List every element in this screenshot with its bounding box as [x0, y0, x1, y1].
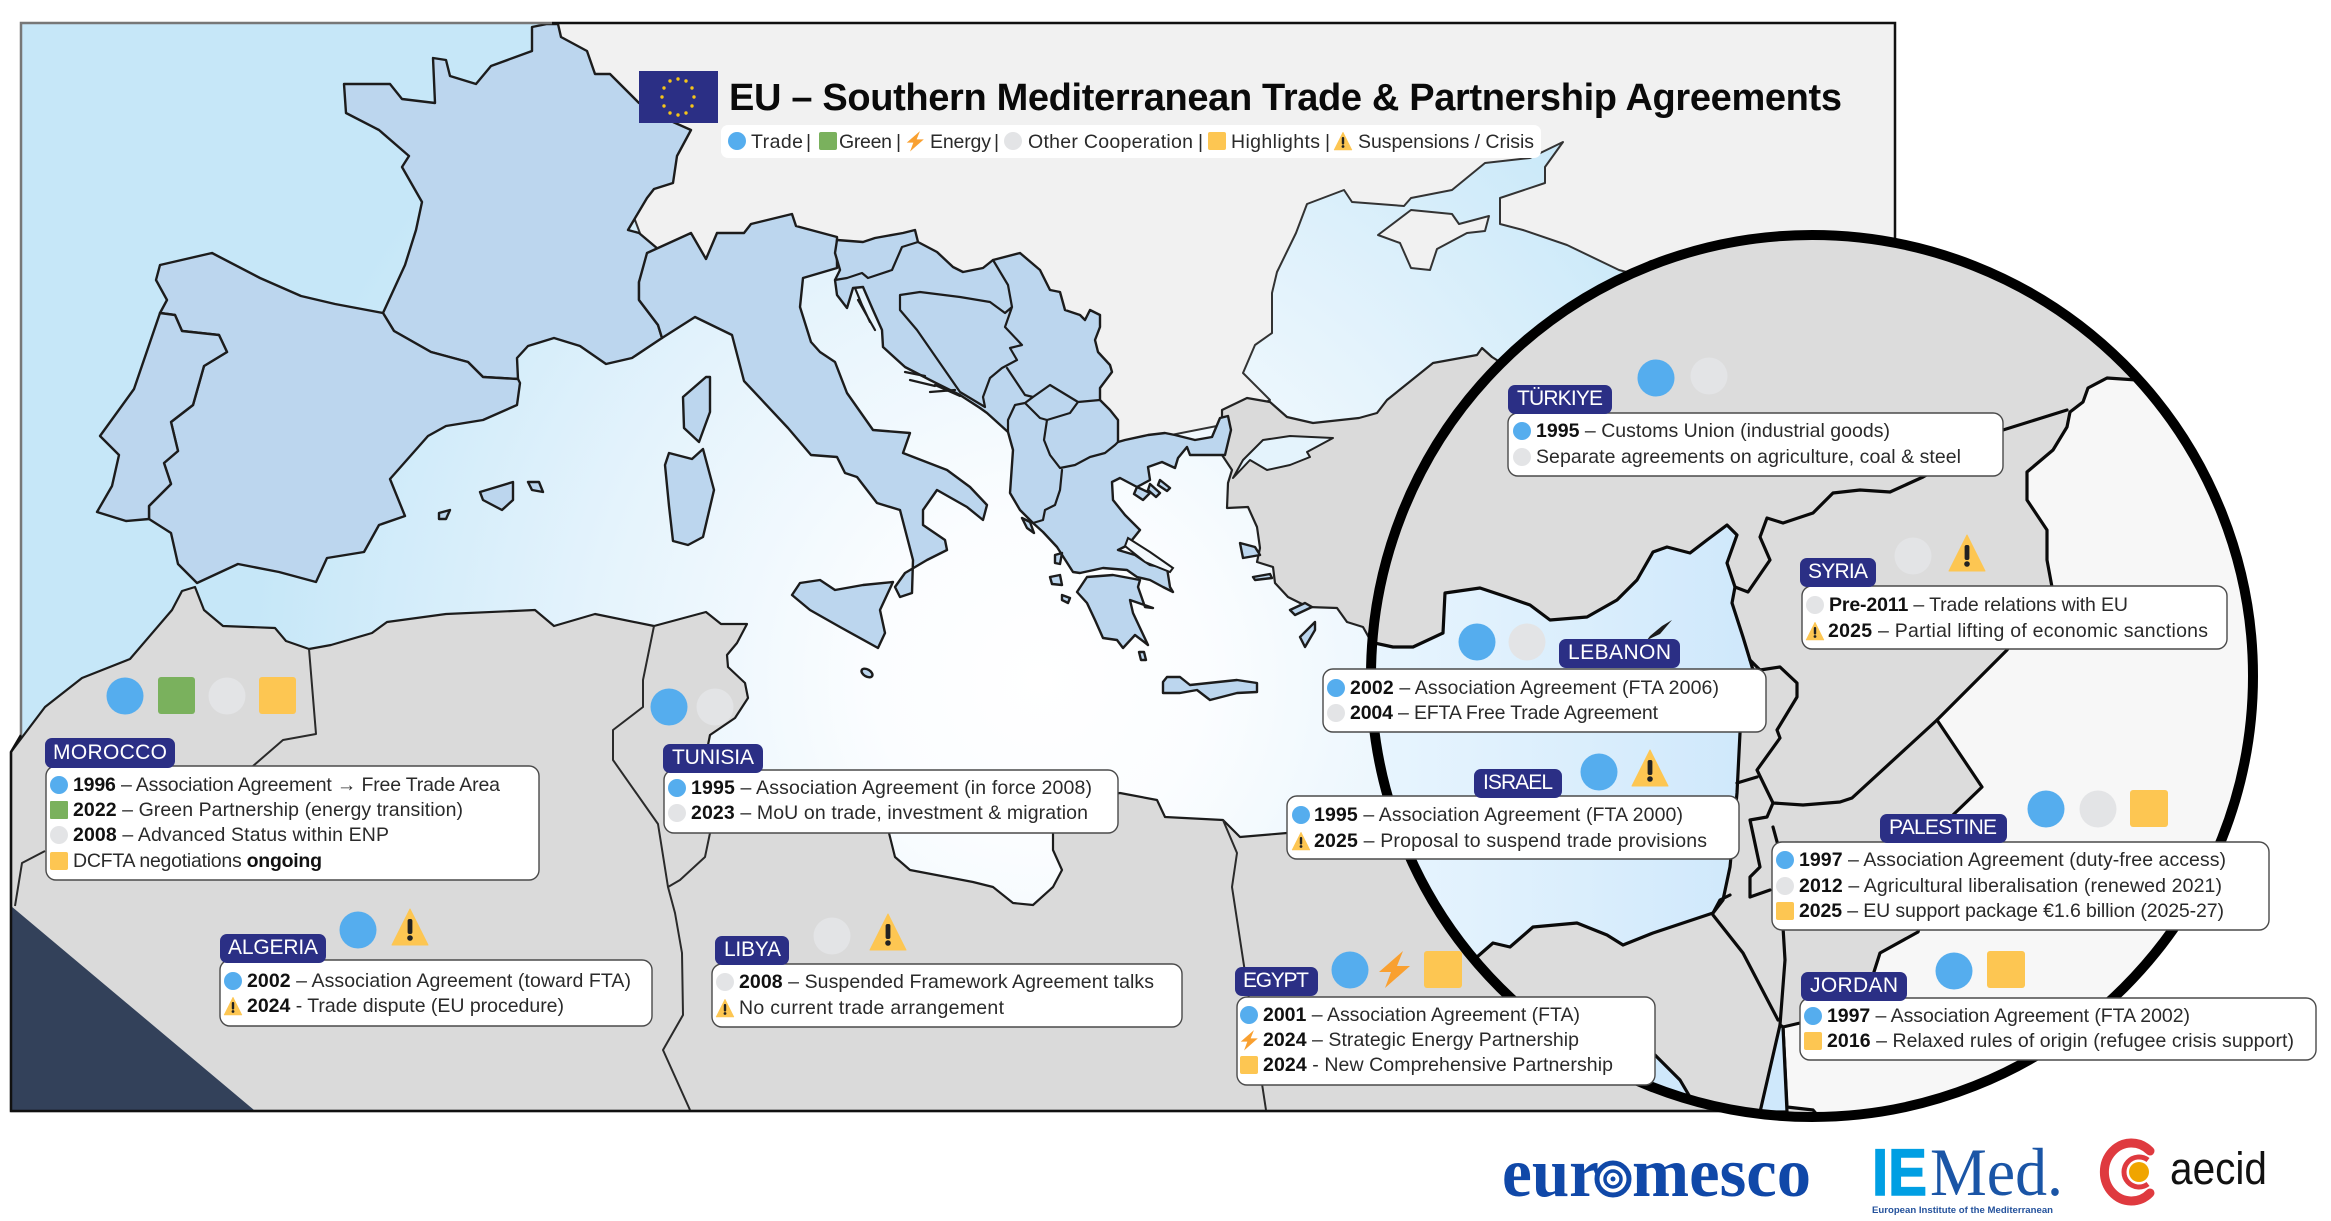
- panel: Egypt: 2001 – Association Agreement (FTA): [1263, 1004, 1580, 1026]
- EU countries: [97, 24, 1315, 700]
- panel: Jordan: [1800, 951, 2316, 1060]
- legend: Suspensions / Crisis: [1358, 131, 1534, 153]
- panel: Palestine: [1772, 790, 2269, 930]
- legend: [721, 125, 1541, 158]
- Crimea: [1378, 210, 1489, 270]
- legend: Energy: [930, 131, 991, 153]
- panel: Jordan: JORDAN: [1810, 974, 1898, 997]
- panel: Egypt: 2024 - New Comprehensive Partnership: [1263, 1054, 1613, 1076]
- North Africa borders: [15, 626, 1266, 1110]
- legend: |: [1325, 131, 1330, 153]
- panel: Morocco: 2022 – Green Partnership (energy transition): [73, 799, 463, 821]
- legend: |: [1198, 131, 1203, 153]
- panel: Libya: No current trade arrangement: [739, 997, 1005, 1019]
- legend: Trade: [751, 131, 803, 153]
- Ionian and Aegean islands: [1022, 518, 1315, 660]
- legend: Green: [839, 131, 892, 153]
- panel: Tunisia: 1995 – Association Agreement (in force 2008): [691, 777, 1092, 799]
- panel: Palestine: 2025 – EU support package €1.6 billion (2025-27): [1799, 900, 2224, 922]
- panel: Lebanon: [1323, 624, 1766, 732]
- panel: Libya: [712, 914, 1182, 1027]
- panel: Morocco: [45, 677, 539, 880]
- panel: Syria: 2025 – Partial lifting of economic sanctions: [1828, 620, 2208, 642]
- legend: |: [994, 131, 999, 153]
- Spain: [149, 253, 520, 583]
- panel: Türkiye: Separate agreements on agriculture, coal & steel: [1536, 446, 1961, 468]
- lens gulfs: [1760, 1025, 1787, 1112]
- panel: Israel: 2025 – Proposal to suspend trade provisions: [1314, 830, 1707, 852]
- panel: Algeria: [220, 909, 652, 1026]
- magnifier lens with Eastern Mediterranean: [1366, 230, 2258, 1122]
- logo: aecid: aecid: [2170, 1143, 2267, 1194]
- frame outline: [11, 23, 1895, 1111]
- panel: Syria: Pre-2011 – Trade relations with EU: [1829, 594, 2128, 616]
- panel: Libya: 2008 – Suspended Framework Agreement talks: [739, 971, 1154, 993]
- Chalkidiki peninsulas: [1134, 480, 1170, 500]
- lens Cyprus: [1647, 620, 1672, 640]
- dark corner: [11, 906, 254, 1110]
- panel: Lebanon: LEBANON: [1568, 641, 1671, 664]
- panel: Türkiye: TÜRKIYE: [1517, 387, 1603, 410]
- panel: Algeria: ALGERIA: [228, 936, 318, 959]
- panel: Lebanon: 2004 – EFTA Free Trade Agreement: [1350, 702, 1659, 724]
- panel: Egypt: [1235, 951, 1655, 1085]
- lens sea: [1376, 523, 1754, 958]
- logo: IEMed: Med.: [1930, 1134, 2063, 1210]
- panel: Egypt: 2024 – Strategic Energy Partnership: [1263, 1029, 1579, 1051]
- panel: Türkiye: [1508, 358, 2003, 476]
- panel: Palestine: PALESTINE: [1889, 816, 1997, 839]
- Euboea: [1125, 538, 1173, 572]
- non-EU Europe land: [552, 23, 1895, 445]
- flag: European Union: [639, 71, 718, 123]
- panel: Syria: SYRIA: [1808, 560, 1868, 583]
- Balkans and mainland Greece: [835, 230, 1231, 592]
- panel: Egypt: EGYPT: [1243, 969, 1309, 992]
- title: EU – Southern Mediterranean Trade & Partnership Agreements: [729, 77, 1842, 119]
- Portugal: [97, 313, 227, 521]
- logo: IEMed: European Institute of the Mediterranean: [1872, 1205, 2053, 1216]
- France: [344, 24, 691, 379]
- legend: Other Cooperation: [1028, 131, 1193, 153]
- panel: Jordan: 1997 – Association Agreement (FTA 2002): [1827, 1005, 2190, 1027]
- panel: Morocco: 1996 – Association Agreement → Free Trade Area: [73, 774, 500, 796]
- logo: euromesco: mesco: [1632, 1135, 1811, 1212]
- panel: Morocco: 2008 – Advanced Status within ENP: [73, 824, 389, 846]
- lens Arabian desert: [1783, 376, 2248, 1112]
- logo: euromesco: eur: [1502, 1135, 1599, 1212]
- logo: IEMed: [1872, 1134, 2063, 1216]
- panel: Tunisia: [650, 688, 1118, 833]
- Sea of Marmara: [1233, 436, 1333, 478]
- logo: euromesco: [1502, 1135, 1811, 1212]
- panel: Israel: ISRAEL: [1483, 771, 1553, 794]
- panel: Palestine: 2012 – Agricultural liberalisation (renewed 2021): [1799, 875, 2222, 897]
- legend: |: [806, 131, 811, 153]
- lens borders: [1713, 410, 2067, 1025]
- Sicily: [792, 580, 893, 648]
- panel: Morocco: MOROCCO: [53, 741, 167, 764]
- Peloponnese: [1077, 575, 1153, 648]
- Dalmatian and Kvarner islands: [855, 288, 960, 396]
- panel: Algeria: 2002 – Association Agreement (toward FTA): [247, 970, 631, 992]
- Italy: [639, 214, 987, 597]
- panel: Israel: 1995 – Association Agreement (FTA 2000): [1314, 804, 1683, 826]
- map frame and sea: [11, 23, 1895, 1111]
- panel: Libya: LIBYA: [724, 938, 781, 961]
- panel: Tunisia: 2023 – MoU on trade, investment & migration: [691, 802, 1088, 824]
- North Africa land: [11, 587, 1750, 1111]
- panel: Tunisia: TUNISIA: [672, 746, 754, 769]
- panel: Palestine: 1997 – Association Agreement (duty-free access): [1799, 849, 2226, 871]
- legend: Highlights: [1231, 131, 1320, 153]
- logo: aecid: [2104, 1143, 2267, 1201]
- Balearic islands: [439, 482, 543, 519]
- panel: Syria: [1800, 535, 2227, 649]
- Crete: [1163, 677, 1257, 700]
- panel: Jordan: 2016 – Relaxed rules of origin (refugee crisis support): [1827, 1030, 2294, 1052]
- panel: Lebanon: 2002 – Association Agreement (FTA 2006): [1350, 677, 1719, 699]
- panel: Israel: [1287, 750, 1739, 859]
- Corsica: [683, 377, 710, 442]
- panel: Türkiye: 1995 – Customs Union (industrial goods): [1536, 420, 1890, 442]
- Sardinia: [665, 449, 714, 545]
- panel: Algeria: 2024 - Trade dispute (EU procedure): [247, 995, 564, 1017]
- legend: |: [896, 131, 901, 153]
- Balkan internal borders: [835, 242, 1118, 523]
- panel: Morocco: DCFTA negotiations ongoing: [73, 850, 322, 872]
- logo: IEMed: IE: [1872, 1135, 1927, 1209]
- Anatolia and Thrace: [1222, 348, 1560, 643]
- Malta: [860, 667, 874, 679]
